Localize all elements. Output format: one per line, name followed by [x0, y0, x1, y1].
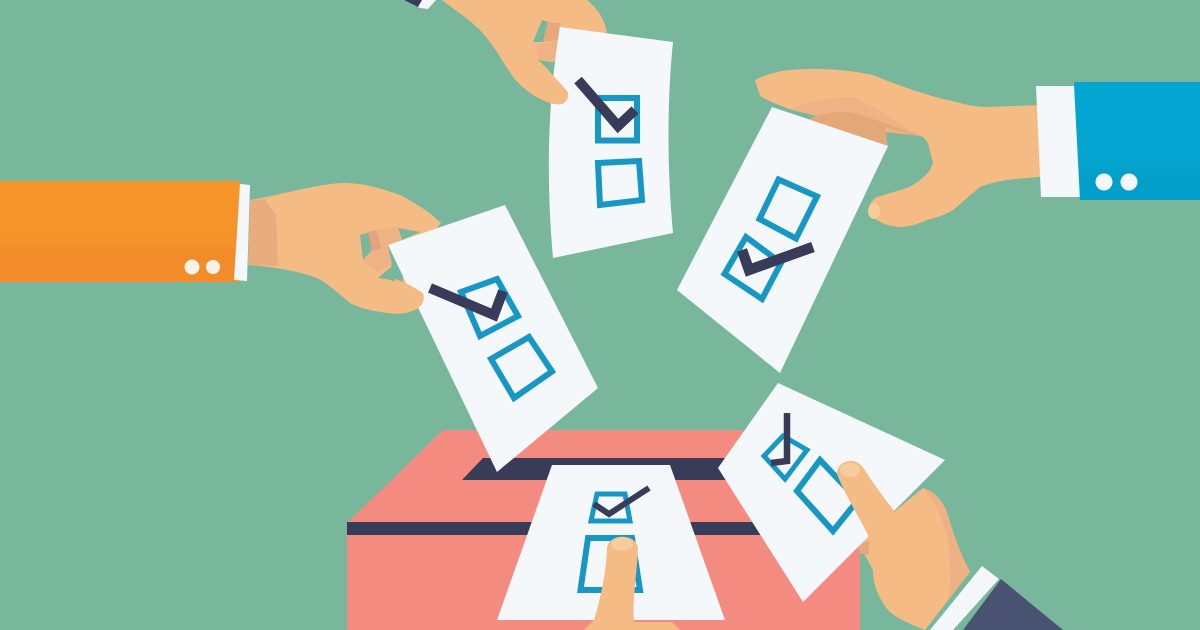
sleeve: navy: [963, 579, 1063, 630]
checkbox: empty: [797, 460, 858, 531]
checkbox: checked: [461, 279, 518, 336]
left hand thumb tip: [388, 279, 424, 314]
buttons: [1096, 174, 1138, 190]
wrist shade: [248, 199, 278, 266]
blue sleeve hand: [755, 69, 1200, 227]
ballot box: [347, 430, 860, 630]
hand gap: [533, 20, 548, 42]
top hand thumb: [513, 55, 568, 104]
ballot: bottom right: [718, 383, 945, 602]
thumb: [345, 278, 424, 314]
box front band: [347, 522, 860, 535]
sleeve: blue: [1074, 82, 1200, 200]
finger shade: [800, 112, 921, 148]
hand back: [860, 488, 970, 630]
checkbox: empty: [598, 161, 642, 205]
check mark: [578, 80, 635, 126]
box slot: [462, 458, 728, 480]
check mark: [771, 413, 787, 463]
checkbox: empty: [760, 180, 817, 238]
thumb nail: [868, 203, 880, 219]
top hand: [404, 0, 607, 80]
bottom finger: [584, 537, 680, 630]
bottom-right thumb and palm: [837, 461, 925, 630]
buttons: [184, 260, 220, 274]
bottom-right sleeve: [930, 566, 1063, 630]
checkbox: checked: [598, 98, 637, 140]
cuff: white: [1036, 86, 1080, 197]
checkbox: empty: [491, 337, 552, 398]
orange sleeve hand: [0, 181, 441, 314]
check mark: [430, 288, 503, 315]
cuff: [930, 566, 999, 630]
checkbox: checked: [764, 436, 807, 479]
hand: left: [250, 183, 441, 314]
checkbox: empty: [580, 538, 640, 590]
checkbox: checked: [724, 237, 781, 299]
hand: right: [755, 69, 1040, 227]
ballot: right: [677, 107, 888, 373]
check mark: [742, 247, 813, 270]
ballot: bottom: [497, 465, 725, 620]
second finger: [793, 97, 921, 136]
ballot: top: [549, 27, 673, 258]
hand: top: [442, 0, 607, 80]
checkbox: checked: [591, 494, 630, 521]
ballot: left: [388, 205, 598, 472]
check mark: [594, 488, 649, 514]
cuff: white: [234, 184, 250, 281]
sleeve: orange: [0, 181, 240, 282]
cuff: top: [404, 0, 436, 9]
bottom-right hand: [858, 488, 970, 630]
hand gap: [398, 228, 420, 240]
fingers behind: [363, 227, 402, 272]
fingers behind: [543, 22, 560, 42]
